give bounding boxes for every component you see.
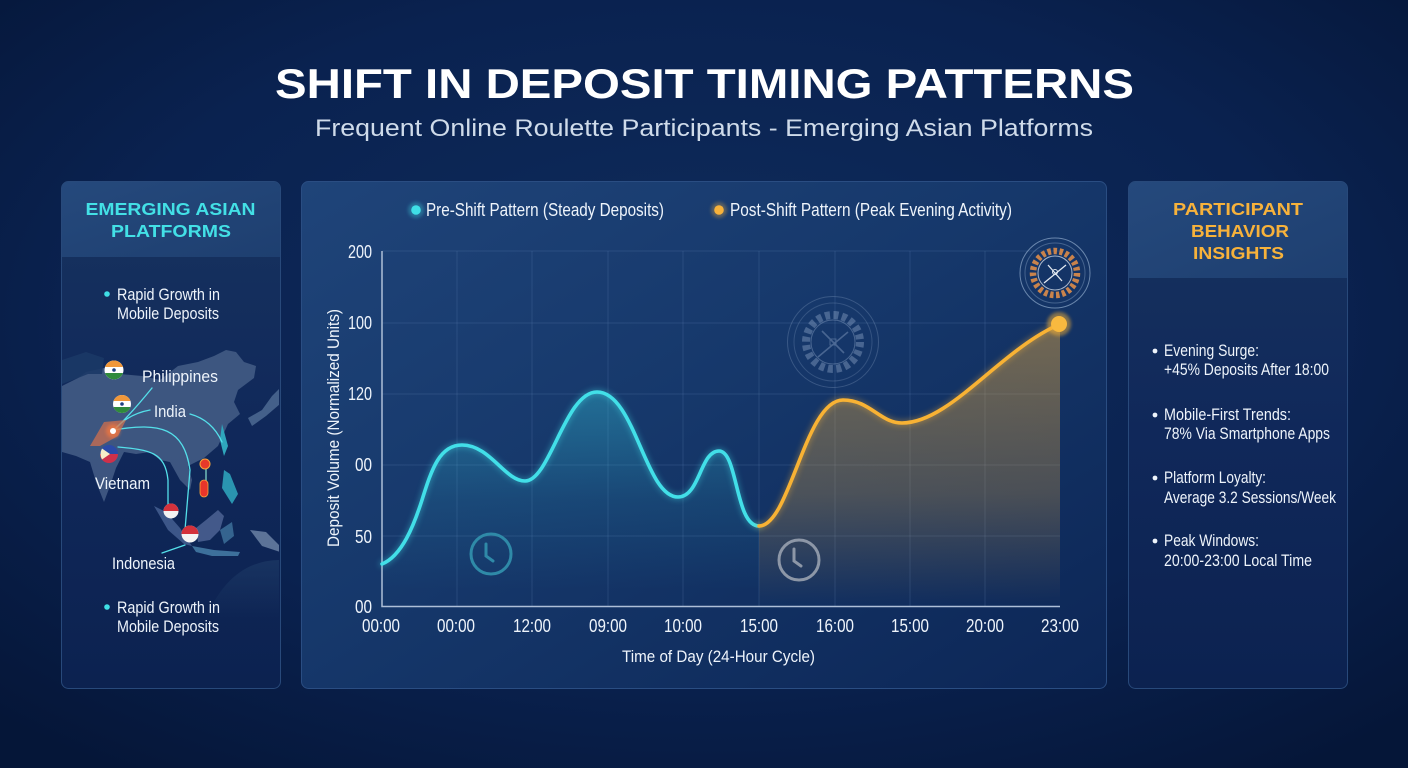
hotspot marker	[90, 420, 126, 446]
map labels: Indonesia	[112, 554, 175, 573]
title: SHIFT IN DEPOSIT TIMING PATTERNS	[275, 60, 1134, 107]
x axis labels: 15:00	[891, 616, 929, 636]
insight: platform loyalty	[1153, 469, 1337, 507]
bottom bullet text: Mobile Deposits	[117, 618, 219, 636]
bottom bullet text: Rapid Growth in	[117, 599, 220, 617]
legend: Pre-Shift Pattern (Steady Deposits)	[426, 200, 664, 220]
x axis labels: 20:00	[966, 616, 1004, 636]
insight: mobile-first trends: 78% Via Smartphone Apps	[1164, 425, 1330, 443]
x axis labels	[362, 616, 1079, 636]
y axis labels: 200	[348, 242, 372, 262]
y axis labels	[348, 242, 372, 617]
panel: participant behavior insights	[1128, 182, 1348, 688]
y axis labels: 00	[355, 455, 372, 475]
end point marker	[1047, 312, 1071, 336]
area: post-shift	[759, 324, 1060, 606]
top bullet text: Rapid Growth in	[117, 286, 220, 304]
insight: platform loyalty: Platform Loyalty:	[1164, 469, 1266, 487]
x axis labels: 00:00	[362, 616, 400, 636]
panel header: emerging asian platforms	[62, 182, 280, 257]
grid lines	[382, 251, 1060, 607]
y axis labels: 100	[348, 313, 372, 333]
line: pre-shift	[382, 392, 759, 564]
land masses	[62, 350, 279, 586]
x axis labels: 12:00	[513, 616, 551, 636]
icon: clock post-shift	[779, 540, 819, 580]
x axis labels: 09:00	[589, 616, 627, 636]
top bullet text: Mobile Deposits	[117, 305, 219, 323]
panel: chart	[302, 182, 1106, 688]
flag: top	[104, 360, 124, 380]
panel header: participant behavior insights	[1129, 182, 1347, 278]
insight: mobile-first trends: Mobile-First Trends:	[1164, 406, 1291, 424]
insight: evening surge: Evening Surge:	[1164, 342, 1259, 360]
x axis labels: 16:00	[816, 616, 854, 636]
flag: philippines	[100, 445, 118, 463]
y axis labels: 00	[355, 597, 372, 617]
icon: roulette wheel	[1020, 238, 1090, 308]
y axis labels: 50	[355, 527, 372, 547]
map labels: India	[154, 402, 186, 421]
x axis labels: 15:00	[740, 616, 778, 636]
axes	[382, 251, 1060, 606]
map of asia	[62, 350, 279, 586]
x axis title: Time of Day (24-Hour Cycle)	[622, 647, 815, 666]
flag: indonesia	[182, 526, 198, 542]
insight: peak windows: 20:00-23:00 Local Time	[1164, 552, 1312, 570]
insight: platform loyalty: Average 3.2 Sessions/Week	[1164, 489, 1337, 507]
x axis labels: 23:00	[1041, 616, 1079, 636]
connection lines	[114, 388, 222, 553]
flag: red-white small	[164, 504, 178, 518]
insight: peak windows	[1153, 532, 1312, 570]
flag: second	[113, 395, 131, 413]
insight: peak windows: Peak Windows:	[1164, 532, 1259, 550]
insight: mobile-first trends	[1153, 406, 1330, 443]
map labels: Vietnam	[95, 474, 150, 493]
top bullet text	[104, 286, 220, 323]
legend	[408, 200, 1012, 220]
line: post-shift	[759, 324, 1060, 526]
y axis labels: 120	[348, 384, 372, 404]
area: pre-shift	[382, 392, 759, 606]
y axis title: Deposit Volume (Normalized Units)	[324, 309, 343, 547]
panel header: participant behavior insights: PARTICIPANT	[1173, 199, 1303, 219]
red markers	[200, 459, 210, 497]
panel header: emerging asian platforms: PLATFORMS	[111, 221, 231, 241]
x axis labels: 10:00	[664, 616, 702, 636]
subtitle: Frequent Online Roulette Participants - Emerging Asian Platforms	[315, 115, 1093, 142]
insight: evening surge	[1153, 342, 1329, 379]
map labels: Philippines	[142, 367, 218, 386]
icon: clock pre-shift	[471, 534, 511, 574]
panel header: participant behavior insights: BEHAVIOR	[1191, 221, 1289, 241]
panel header: emerging asian platforms: EMERGING ASIAN	[86, 199, 256, 219]
bottom bullet text	[104, 599, 220, 636]
insight: evening surge: +45% Deposits After 18:00	[1164, 361, 1329, 379]
map labels	[95, 367, 218, 573]
panel: emerging asian platforms	[62, 182, 280, 688]
icon: faded roulette wheel	[788, 296, 878, 388]
x axis labels: 00:00	[437, 616, 475, 636]
legend: Post-Shift Pattern (Peak Evening Activity)	[730, 200, 1012, 220]
panel header: participant behavior insights: INSIGHTS	[1193, 243, 1284, 263]
